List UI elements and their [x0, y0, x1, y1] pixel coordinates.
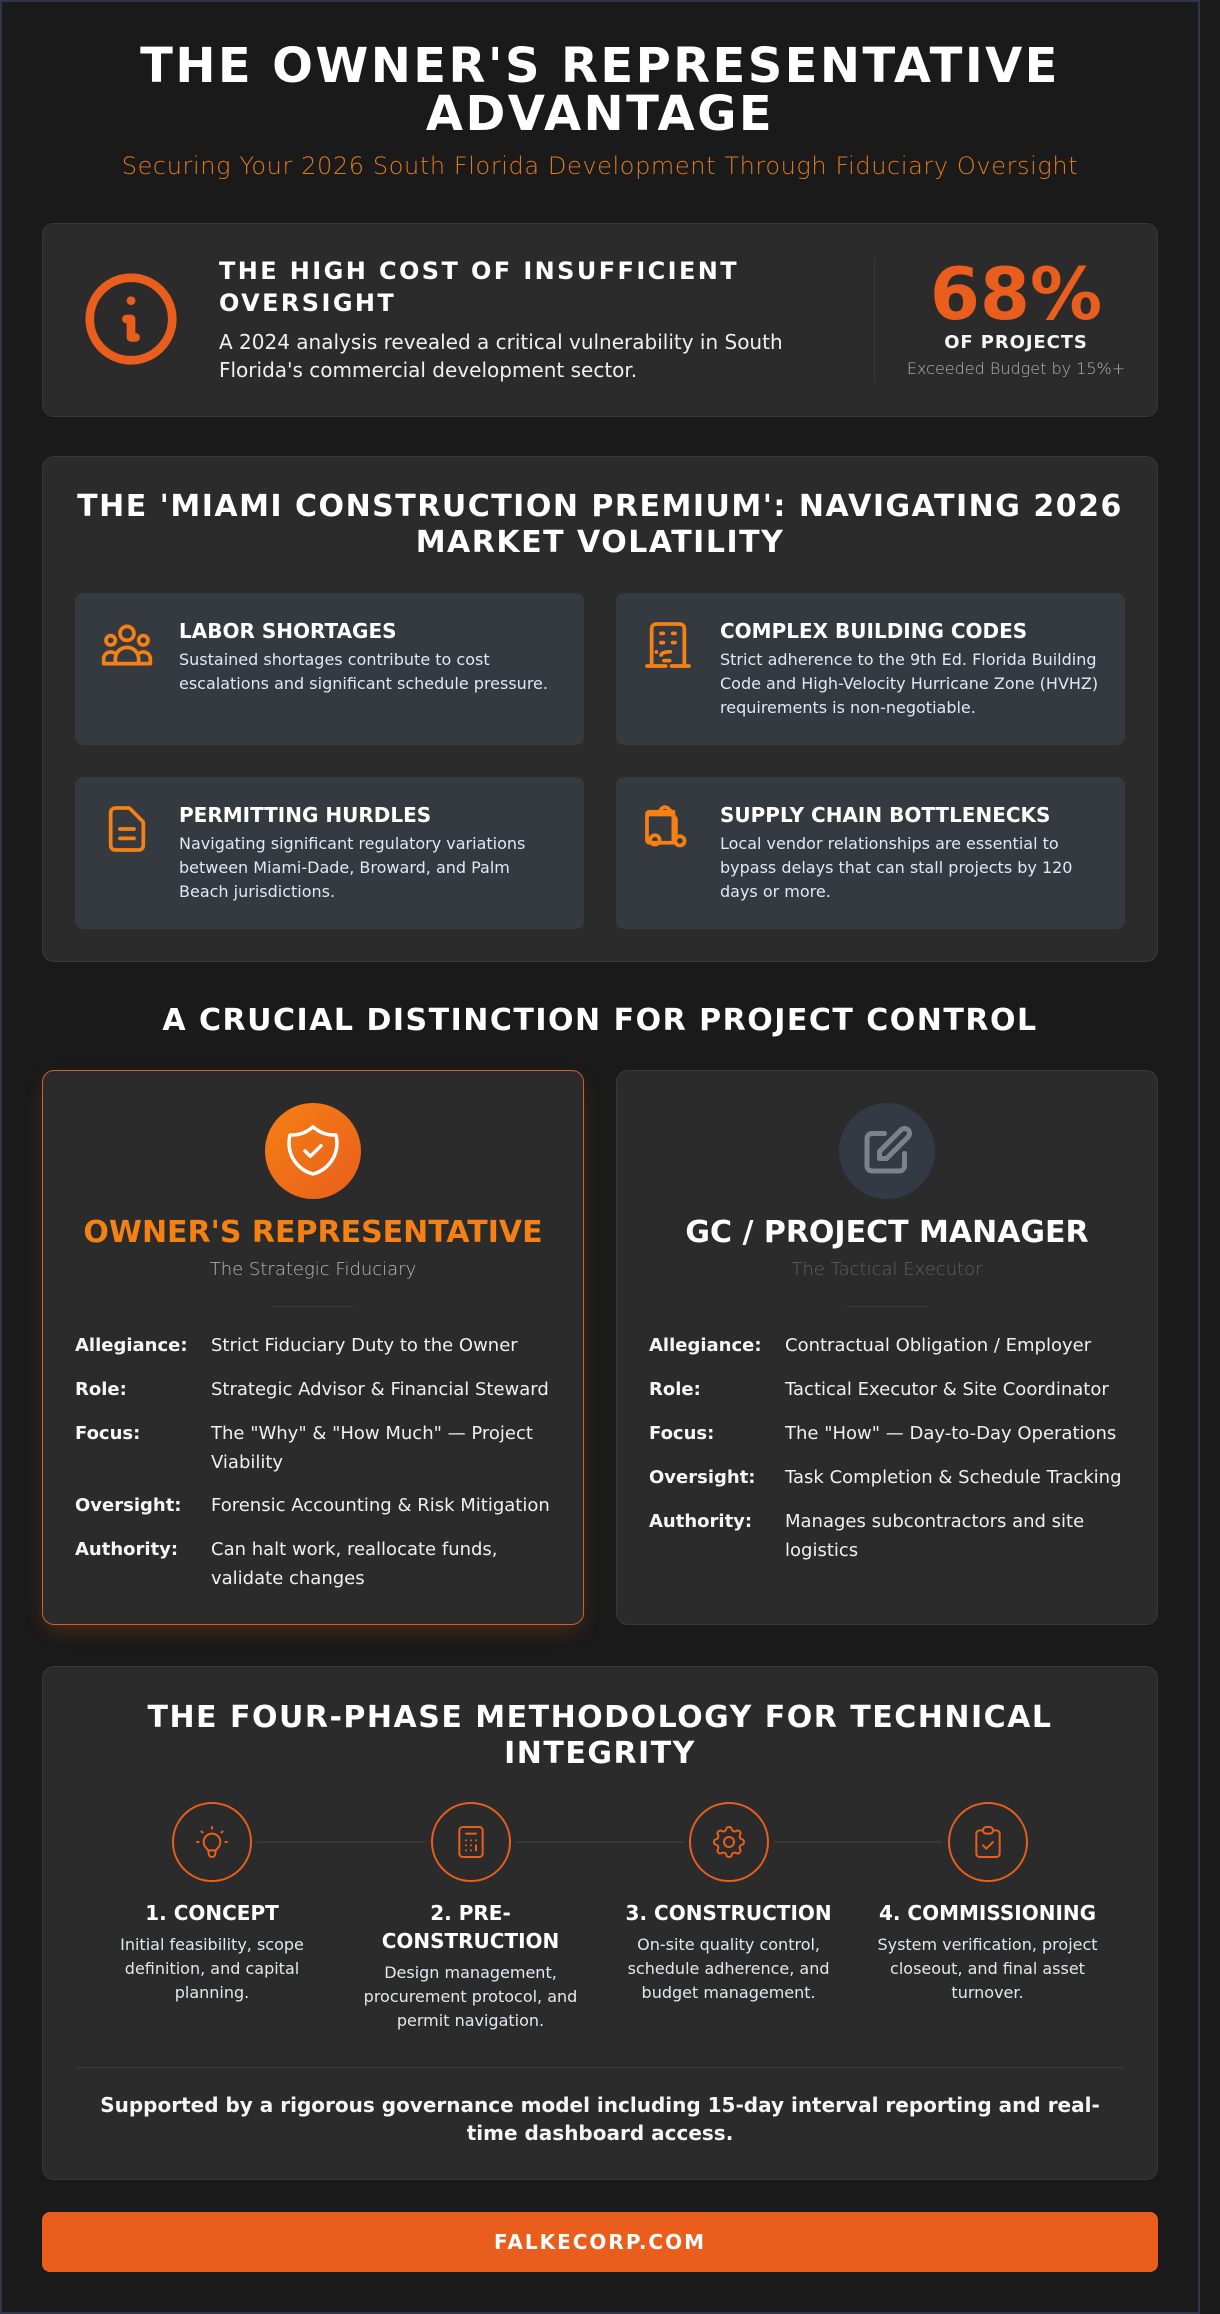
card text [179, 834, 525, 901]
card text: requirements is non-negotiable. [720, 698, 976, 717]
title: ADVANTAGE [426, 86, 774, 142]
card: permitting hurdles [75, 777, 584, 929]
row: role: Role: [75, 1379, 127, 1400]
card: labor shortages [75, 593, 584, 745]
step text [120, 1935, 304, 2002]
step text: permit navigation. [397, 2011, 544, 2030]
icon: gear [689, 1802, 769, 1882]
section heading: THE FOUR-PHASE METHODOLOGY FOR TECHNICAL [147, 1700, 1053, 1735]
row: authority: Manages subcontractors and site [785, 1511, 1084, 1532]
row: focus [75, 1423, 533, 1473]
step text: turnover. [951, 1983, 1024, 2002]
comparison rows [649, 1335, 1122, 1561]
card text: Sustained shortages contribute to cost [179, 650, 490, 669]
icon: pencil edit [839, 1103, 935, 1199]
section heading [147, 1700, 1053, 1771]
row: allegiance: Strict Fiduciary Duty to the Owner [211, 1335, 518, 1356]
section heading: INTEGRITY [504, 1736, 696, 1771]
role subtitle: The Strategic Fiduciary [210, 1259, 416, 1280]
role title: GC / PROJECT MANAGER [685, 1215, 1089, 1250]
row: authority [75, 1539, 498, 1589]
card text: bypass delays that can stall projects by 120 [720, 858, 1072, 877]
governance note [100, 2093, 1100, 2145]
phase steps [120, 1802, 1098, 2030]
row: authority: Authority: [649, 1511, 752, 1532]
card text: Beach jurisdictions. [179, 882, 335, 901]
alert heading [219, 257, 739, 317]
step title [382, 1901, 559, 1953]
row: allegiance [75, 1335, 518, 1356]
alert text: Florida's commercial development sector. [219, 358, 637, 382]
card text: Local vendor relationships are essential to [720, 834, 1059, 853]
icon: delivery truck [645, 805, 686, 848]
alert heading: OVERSIGHT [219, 289, 396, 317]
row: focus: Focus: [649, 1423, 714, 1444]
step text: Initial feasibility, scope [120, 1935, 304, 1954]
governance note: time dashboard access. [467, 2121, 733, 2145]
step title: 3. CONSTRUCTION [626, 1901, 832, 1925]
governance note: Supported by a rigorous governance model including 15-day interval reporting and real- [100, 2093, 1100, 2117]
card: complex building codes [616, 593, 1125, 745]
footer bar: FALKECORP.COM [494, 2230, 706, 2254]
card text: Strict adherence to the 9th Ed. Florida Building [720, 650, 1097, 669]
card text: Navigating significant regulatory variations [179, 834, 525, 853]
step text [628, 1935, 830, 2002]
step text: Design management, [384, 1963, 557, 1982]
step text: System verification, project [877, 1935, 1098, 1954]
panel: high cost of insufficient oversight [42, 223, 1158, 417]
step 3: construction [626, 1802, 832, 2002]
row: oversight: Forensic Accounting & Risk Mitigation [211, 1495, 550, 1516]
stat number: 68% [930, 252, 1102, 336]
row: oversight: Oversight: [75, 1495, 182, 1516]
row: authority [649, 1511, 1084, 1561]
section heading: MARKET VOLATILITY [416, 525, 784, 560]
step title: 2. PRE- [430, 1901, 511, 1925]
title: THE OWNER'S REPRESENTATIVE [140, 38, 1060, 94]
step title: 1. CONCEPT [145, 1901, 279, 1925]
card text: Code and High-Velocity Hurricane Zone (HVHZ) [720, 674, 1098, 693]
row: oversight: Task Completion & Schedule Tracking [785, 1467, 1122, 1488]
card title: LABOR SHORTAGES [179, 619, 397, 643]
row: role: Strategic Advisor & Financial Steward [211, 1379, 549, 1400]
step 1: concept [120, 1802, 304, 2002]
icon: info circle [85, 273, 177, 365]
card title: PERMITTING HURDLES [179, 803, 431, 827]
role subtitle: The Tactical Executor [791, 1259, 983, 1280]
row: allegiance: Allegiance: [649, 1335, 762, 1356]
row: authority: Authority: [75, 1539, 178, 1560]
footer bar [42, 2212, 1158, 2272]
icon: shield check [265, 1103, 361, 1199]
row: authority: validate changes [211, 1568, 365, 1589]
step title: CONSTRUCTION [382, 1929, 559, 1953]
row: focus: The "How" — Day-to-Day Operations [785, 1423, 1116, 1444]
card text [720, 834, 1072, 901]
panel: GC / project manager [616, 1070, 1158, 1625]
icon: document [108, 806, 146, 852]
step 4: commissioning [877, 1802, 1098, 2002]
title [140, 38, 1060, 142]
card text [720, 650, 1098, 717]
section heading [77, 489, 1123, 560]
comparison rows [75, 1335, 550, 1589]
icon: calculator [430, 1802, 510, 1882]
row: allegiance [649, 1335, 1092, 1356]
card title: COMPLEX BUILDING CODES [720, 619, 1027, 643]
icon: people [102, 624, 152, 666]
row: focus: The "Why" & "How Much" — Project [211, 1423, 533, 1444]
subtitle: Securing Your 2026 South Florida Development Through Fiduciary Oversight [122, 152, 1078, 180]
alert heading: THE HIGH COST OF INSUFFICIENT [219, 257, 739, 285]
stat label: OF PROJECTS [944, 332, 1088, 353]
section heading: THE 'MIAMI CONSTRUCTION PREMIUM': NAVIGATING 2026 [77, 489, 1123, 524]
step text [877, 1935, 1098, 2002]
row: role: Role: [649, 1379, 701, 1400]
card: supply chain bottlenecks [616, 777, 1125, 929]
card text [179, 650, 548, 693]
card text: between Miami-Dade, Broward, and Palm [179, 858, 510, 877]
row: role: Tactical Executor & Site Coordinator [785, 1379, 1109, 1400]
card text: escalations and significant schedule pressure. [179, 674, 548, 693]
row: oversight: Oversight: [649, 1467, 756, 1488]
step text: schedule adherence, and [628, 1959, 830, 1978]
card text: days or more. [720, 882, 831, 901]
icon: building [645, 622, 691, 668]
step text: definition, and capital [125, 1959, 299, 1978]
panel: Miami construction premium [42, 456, 1158, 962]
section heading: crucial distinction: A CRUCIAL DISTINCTION FOR PROJECT CONTROL [162, 1003, 1038, 1038]
panel: four-phase methodology [42, 1666, 1158, 2180]
step text: planning. [175, 1983, 249, 2002]
panel: owner's representative [42, 1070, 584, 1625]
step text: budget management. [642, 1983, 816, 2002]
role title: OWNER'S REPRESENTATIVE [83, 1215, 543, 1250]
statistic: 68% [907, 252, 1125, 378]
card title: SUPPLY CHAIN BOTTLENECKS [720, 803, 1050, 827]
alert text [219, 330, 783, 382]
stat note: Exceeded Budget by 15%+ [907, 359, 1125, 378]
icon: clipboard check [948, 1802, 1028, 1882]
step text: closeout, and final asset [890, 1959, 1085, 1978]
row: focus: Focus: [75, 1423, 140, 1444]
step text: procurement protocol, and [364, 1987, 577, 2006]
row: authority: logistics [785, 1540, 858, 1561]
row: authority: Can halt work, reallocate funds, [211, 1539, 498, 1560]
connector lines [257, 1841, 942, 1843]
divider [874, 257, 875, 383]
step 2: pre-construction [364, 1802, 577, 2030]
icon: light bulb [172, 1802, 252, 1882]
step text [364, 1963, 577, 2030]
row: allegiance: Allegiance: [75, 1335, 188, 1356]
step title: 4. COMMISSIONING [879, 1901, 1096, 1925]
alert text: A 2024 analysis revealed a critical vulnerability in South [219, 330, 783, 354]
step text: On-site quality control, [637, 1935, 820, 1954]
row: focus: Viability [211, 1452, 283, 1473]
row: allegiance: Contractual Obligation / Employer [785, 1335, 1091, 1356]
